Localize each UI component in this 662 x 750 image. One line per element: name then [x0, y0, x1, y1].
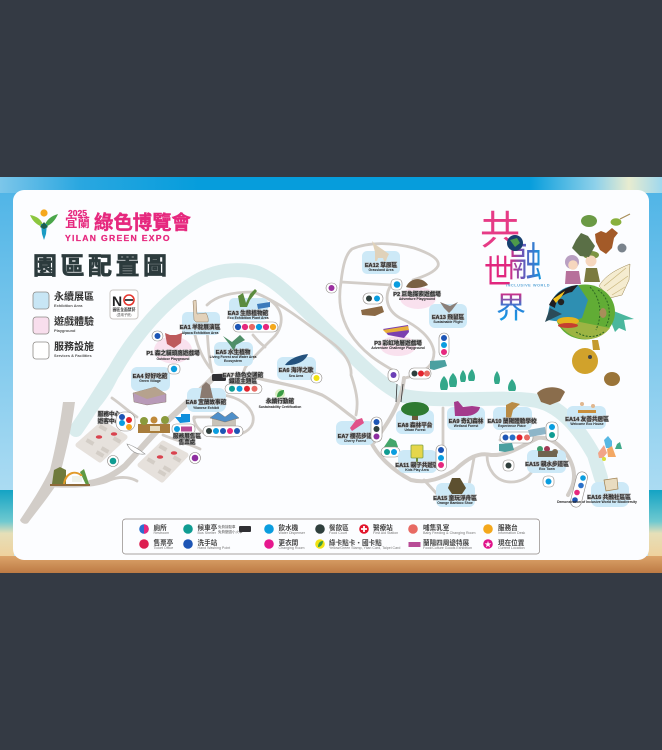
- legend: yilan fair: Food/Culture Goods Exhibition: [423, 546, 472, 550]
- legend: changing room: 更衣間: [278, 538, 299, 547]
- legend: area types: [33, 290, 94, 359]
- girl character: [565, 255, 581, 284]
- legend: changing room: Changing Room: [278, 546, 304, 550]
- area: visitor centre: [186, 382, 227, 412]
- illustration: bird planet with animals: [545, 214, 634, 386]
- vertical service pill: [439, 333, 449, 357]
- icon: cherry branch: [350, 418, 364, 431]
- exhibition area key: [33, 290, 94, 309]
- parking lot east: [140, 443, 186, 480]
- legend: bus shelter: Bus Shelter: [198, 531, 217, 535]
- area: goat: Grassland Area: [369, 268, 394, 272]
- service pill with six icons: [233, 322, 278, 332]
- legend: baby room: Baby Feeding & Changing Room: [423, 531, 476, 535]
- legend: bus shelter: 免費接駁車: [218, 524, 236, 529]
- legend: restroom: [139, 523, 169, 535]
- area: fun sign: [395, 445, 439, 473]
- service pill at centre: [116, 412, 135, 431]
- area: green village: Green Village: [139, 379, 161, 383]
- tree icons: [440, 369, 516, 391]
- area: people: EA14 友善共居區: [565, 415, 609, 423]
- area: owl playground: Outdoor Playground: [157, 357, 189, 361]
- english subtitle: INCLUSIVE WORLD: [506, 282, 550, 288]
- icon: spiny fish: [537, 387, 565, 405]
- no smoking notice: 園區全面禁菸: [113, 307, 136, 312]
- legend: food court: [315, 523, 349, 535]
- central and east main road: [371, 378, 574, 495]
- area: brown tree: EA10 蘭陽體驗學校: [487, 417, 537, 425]
- vertical pill by sign: [436, 445, 446, 471]
- icon: globe: [507, 235, 523, 251]
- area: cherry flowers: EA7 櫻花步道: [338, 432, 373, 440]
- restroom pill near bridge: [388, 369, 399, 382]
- car marker: [111, 432, 117, 436]
- area: inclusive community: Demonstration of Inclusive World for Biodiversity: [557, 500, 637, 504]
- legend: ticket office: 售票亭: [154, 538, 174, 547]
- area: purple creature: Wetland Forest: [454, 424, 479, 428]
- area: alpaca: EA1 羊駝展演區: [180, 323, 221, 331]
- legend: water dispenser: Water Dispenser: [278, 531, 306, 535]
- icon: train: [212, 374, 226, 381]
- blue-roof buildings: [210, 412, 239, 426]
- area: figures: Eco Town: [539, 467, 555, 471]
- area: botanical: EA3 生態植物館: [228, 309, 269, 317]
- icon: blue kiosk: [175, 414, 190, 423]
- legend: first aid: First Aid Station: [373, 531, 398, 535]
- playground key: Playground: [54, 328, 76, 333]
- area: rainbow adventure playground: [371, 325, 425, 356]
- area: turtle playground: P2 巨龜探索遊戲場: [393, 290, 441, 298]
- legend: bus shelter: 免費遊園小火車: [218, 529, 243, 534]
- icon: coloured pillars: [598, 436, 622, 461]
- area: fun sign: Kids Play Area: [405, 468, 429, 472]
- area: glider: [429, 302, 467, 328]
- area: whale: Sea Area: [289, 374, 303, 378]
- legend: food court: 餐飲區: [329, 523, 349, 532]
- icon: turtle: [406, 279, 428, 288]
- icon: owl: [165, 333, 182, 348]
- no smoking notice: (含電子菸): [117, 312, 131, 317]
- legend: food court: Food Court: [329, 531, 347, 535]
- west loops: [195, 292, 331, 374]
- legend: current location: [483, 538, 525, 550]
- legend: current location: 現在位置: [498, 538, 525, 547]
- area: owl playground: P1 森之貓頭鷹遊戲場: [146, 349, 200, 357]
- area: bird centre: EA5 水生植物: [216, 348, 251, 356]
- parking lot west: [78, 423, 125, 460]
- service pill three icons: [409, 368, 431, 379]
- pill with four icons: [500, 432, 533, 443]
- service centre label: [98, 410, 121, 425]
- kiosk label: [173, 432, 201, 446]
- bus stop marker: [108, 456, 118, 466]
- legend: yilan fair: 蘭陽四周邊特展: [423, 538, 470, 547]
- icon: clipboard: [604, 478, 618, 491]
- frog: [581, 215, 597, 227]
- service key: [33, 340, 94, 359]
- dark food marker: [503, 460, 514, 471]
- area: dragon boat: [433, 478, 477, 507]
- icon: purple creature: [454, 401, 480, 416]
- legend panel: [122, 519, 540, 554]
- north loop: [331, 244, 438, 415]
- spotted toad: [572, 340, 600, 374]
- legend: information desk: Information Desk: [498, 531, 525, 535]
- legend: bus shelter: 候車亭: [198, 523, 218, 532]
- area: cherry flowers: Cherry Forest: [344, 439, 367, 443]
- icon: teal hut: [430, 360, 447, 370]
- service pill four icons: [225, 384, 262, 394]
- icon: market stalls: [138, 416, 170, 433]
- red car: [96, 435, 102, 439]
- drinking water marker: [168, 364, 180, 374]
- area: bird centre: Living Forest and Water Area: [210, 355, 257, 359]
- cat: [618, 244, 626, 252]
- area: tree forest: EA8 森林平台: [398, 421, 433, 429]
- small flying bird: [610, 214, 630, 226]
- legend: hand washing: Hand Washing Point: [198, 546, 230, 550]
- sustainability leaf label: Sustainability Certification: [259, 405, 301, 409]
- legend: current location: ★: [484, 540, 492, 548]
- restroom marker near owl: [152, 331, 163, 341]
- icon: teal structure: [499, 443, 514, 452]
- legend: water dispenser: [264, 523, 306, 535]
- road network: [20, 244, 574, 524]
- playground key: 遊戲體驗: [54, 315, 94, 328]
- area: inclusive community: EA16 共融社區區: [587, 493, 631, 501]
- area: purple creature: EA9 奇幻森林: [449, 417, 484, 425]
- area: train station: EA7 綠色交通館: [223, 371, 264, 379]
- legend: restroom: 廁所: [154, 523, 167, 532]
- head: [548, 285, 588, 321]
- icon: float: [448, 478, 466, 494]
- area: purple creature: [447, 401, 485, 430]
- icon: figures: [537, 446, 558, 457]
- expo logo: 宜蘭: [65, 215, 90, 230]
- poster background: sky, sea and sand: [0, 177, 662, 573]
- area: people: [565, 402, 609, 429]
- playground key: [33, 315, 94, 334]
- area: brown tree: [487, 402, 537, 430]
- service pill two icons: [363, 293, 383, 304]
- sustainability leaf label: [259, 389, 301, 409]
- area: alpaca: Alpaca Exhibition Area: [182, 331, 219, 335]
- area: tree forest: [396, 402, 434, 434]
- area: glider: EA13 飛鼠區: [432, 313, 465, 321]
- area: goat: EA12 草原區: [365, 261, 398, 269]
- icon: figure: [200, 382, 213, 398]
- icon: whale: [285, 354, 308, 365]
- area: visitor centre: Yilanese Exhibit: [193, 406, 220, 410]
- river: [70, 270, 601, 478]
- area: figures: EA15 親水步道區: [525, 460, 569, 468]
- icon: boat: [127, 444, 145, 454]
- icon: entrance gate: [50, 467, 90, 486]
- area: people: Welcome Eco House: [570, 422, 604, 426]
- icon: flying squirrel: [440, 302, 458, 313]
- heading: site map: 園區配置圖: [33, 253, 170, 280]
- vertical pill by cherry: [371, 417, 382, 442]
- area: rainbow adventure playground: Adventure Challenge Playground: [371, 346, 425, 350]
- white map panel: [13, 190, 649, 560]
- area: turtle playground: Adventure Playground: [399, 297, 435, 301]
- logo icon: [30, 209, 58, 240]
- area: cherry flowers: [336, 418, 374, 445]
- entry avenue: [90, 378, 213, 483]
- legend: changing room: [264, 538, 304, 550]
- legend: first aid: [359, 523, 398, 535]
- icon: goat: [372, 241, 389, 261]
- icon: rainbow strata: [383, 325, 409, 338]
- icon: brown trunk: [506, 402, 520, 418]
- area: dragon boat: EA15 童玩浮舟區: [433, 494, 477, 502]
- area: figures: [525, 446, 569, 473]
- tail: [611, 310, 634, 332]
- main entrance road: [20, 402, 75, 524]
- legend: first aid: 醫療站: [373, 523, 393, 532]
- area: bird centre: Ecosystem: [224, 359, 242, 363]
- icon: blue pavilion: [257, 302, 270, 309]
- legend: ticket office: [139, 538, 174, 550]
- kiosk label: 服務展售區: [173, 432, 201, 440]
- area: inclusive community: [557, 478, 637, 507]
- legend: water dispenser: 飲水機: [278, 523, 299, 532]
- area: botanical: Eco Exhibition Plant Area: [227, 316, 269, 320]
- area: fun sign: EA11 親子共遊區: [395, 461, 439, 469]
- area: dragon boat: Orange Bamboo Shoe: [437, 501, 473, 505]
- kiosk label: 售票處: [179, 438, 196, 446]
- plant: [572, 233, 595, 257]
- icon: colourful building: [133, 387, 166, 405]
- diagonal pill: [569, 471, 589, 508]
- restroom marker at east lot: [190, 452, 200, 464]
- area: green village: EA4 好好吃館: [133, 372, 168, 380]
- character 世: 世: [484, 253, 512, 292]
- wing: [599, 264, 630, 298]
- legend: stamp cards: 綠卡點卡・國卡點: [329, 538, 382, 547]
- expo logo: [30, 208, 192, 243]
- sustainability leaf label: 永續行動館: [266, 397, 294, 405]
- area: owl playground: [146, 333, 200, 364]
- icon: big tree: [401, 402, 429, 420]
- area: botanical: [227, 289, 270, 320]
- area: turtle playground: [393, 279, 441, 309]
- water marker by turtle: [391, 279, 402, 290]
- exhibition area key: Exhibition Area: [54, 303, 83, 308]
- area: bird centre: [210, 335, 257, 366]
- legend: stamp cards: [315, 538, 400, 550]
- area: visitor centre: EA8 宜蘭故事館: [186, 398, 227, 406]
- legend: hand washing: [183, 538, 230, 550]
- logo english name: YILAN GREEN EXPO: [65, 233, 171, 243]
- legend: stamp cards: Yellow/Green Stamp, Yilan Card, Taipei Card: [329, 546, 400, 550]
- icon: alpaca: [193, 300, 208, 322]
- no smoking notice: N: [112, 293, 122, 309]
- legend: hand washing: 洗手站: [198, 538, 218, 547]
- icon: wooden house: [361, 306, 384, 316]
- leaf marker: [311, 373, 322, 383]
- area: green village: [131, 367, 170, 391]
- character 融: 融: [508, 239, 542, 285]
- no smoking notice: [110, 290, 138, 319]
- area: alpaca: [180, 300, 221, 335]
- service key: 服務設施: [54, 340, 94, 353]
- area: goat: [362, 241, 400, 274]
- chest: [557, 317, 579, 325]
- character 共: 共: [480, 209, 520, 253]
- icon: bird: [223, 335, 245, 351]
- icon: people at table: [578, 402, 596, 413]
- legend: restroom: Restroom: [154, 531, 169, 535]
- logo name: 綠色博覽會: [94, 211, 192, 234]
- area: rainbow adventure playground: P3 彩虹地層遊戲場: [374, 339, 422, 347]
- logo year and place: 2025: [68, 208, 87, 218]
- area: brown tree: Experience Place: [498, 424, 526, 428]
- frog and pill: [381, 438, 400, 457]
- small crab: [604, 372, 620, 386]
- legend: baby room: [408, 523, 476, 535]
- exhibition area key: 永續展區: [54, 290, 94, 303]
- area: whale: EA6 海洋之歌: [279, 366, 314, 374]
- deer head: [595, 228, 618, 254]
- legend: ticket office: Ticket Office: [154, 546, 173, 550]
- area: whale: [277, 354, 316, 380]
- bridge: [396, 384, 403, 402]
- service key: Services & Facilities: [54, 353, 92, 358]
- service pill five icons: [203, 426, 243, 436]
- service centre label: 服務中心: [98, 410, 121, 418]
- artwork title: inclusive world: [480, 209, 550, 325]
- icon: plant: [238, 289, 257, 307]
- icon: sign: [411, 445, 423, 464]
- pill two icons: [546, 422, 558, 441]
- legend: information desk: [483, 523, 525, 535]
- restroom marker north-west: [326, 283, 337, 293]
- character 界: 界: [496, 292, 526, 325]
- service centre label: 遊客中心: [98, 417, 121, 425]
- legend: bus shelter: [183, 523, 251, 535]
- area: tree forest: Urban Forest: [404, 428, 426, 432]
- area: glider: Sustainable Flight: [433, 320, 463, 324]
- service pill near kiosk: [172, 424, 195, 434]
- legend: yilan fair: [408, 538, 472, 550]
- water marker: [543, 476, 554, 487]
- legend: information desk: 服務台: [498, 523, 518, 532]
- area: train station: 鐵道主題區: [229, 377, 257, 385]
- green ball: [555, 284, 615, 340]
- area: train station: [212, 371, 264, 385]
- icon: small pavilion: [528, 427, 546, 437]
- legend: current location: Current Location: [498, 546, 525, 550]
- legend: baby room: 哺集乳室: [423, 523, 450, 532]
- beak: [545, 308, 562, 322]
- boy character: [583, 251, 600, 282]
